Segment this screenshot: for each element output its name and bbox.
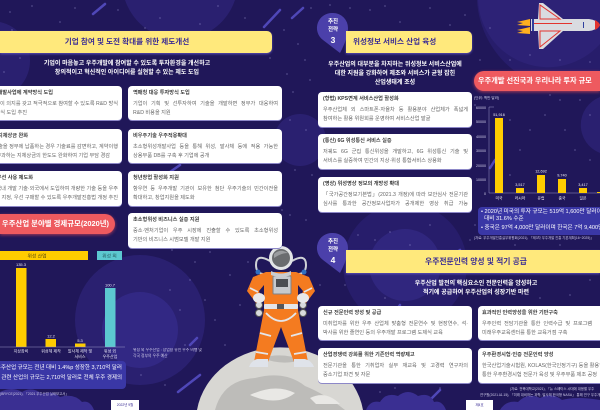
- heading: space economy by sector: [0, 214, 115, 234]
- pin: strategy 3: 전략: [328, 25, 338, 33]
- bar chart: space economy by sector: 위성 외: [102, 252, 117, 260]
- card: youth startups: 항우연 등 우주개발 기관이 보유한 첨단 우주기술의 민간이전을: [133, 186, 278, 192]
- text: space workforce lede: [415, 280, 538, 296]
- card: 6G: (통신) 6G 위성통신 서비스 실증: [323, 138, 392, 144]
- card: training infrastructure: 효과적인 인력양성을 위한 기반구축: [482, 310, 558, 316]
- bar chart: space economy by sector: 12.2: [47, 334, 56, 338]
- text: system improvement lede: [44, 60, 210, 76]
- card: reverse matching: R&D 비용을 지원: [133, 110, 171, 116]
- card: priority use system: [0, 171, 122, 206]
- text: satellite information lede: 대한 지원을 강화하여 제조와 서비스가 균형 잡힌: [335, 70, 455, 76]
- text: space workforce lede: 우주산업 발전의 핵심요소인 전문인력을 양성하고: [415, 280, 537, 286]
- bar chart: investment by country: 미국: [496, 196, 503, 200]
- card: existing workforce: 전문기관을 통한 기취업자 실무 재교육 및 고경력 연구자의: [323, 362, 468, 368]
- heading: investment comparison: [474, 71, 600, 90]
- card: 6G: 서비스를 실증하여 민간의 지상·위성 통합서비스 상용화: [323, 158, 442, 164]
- bar chart: investment by country: (단위: 백만 달러): [474, 95, 499, 100]
- panel: system improvement heading: 기업 참여 및 도전 확대를 위한 제도개선: [65, 37, 189, 46]
- bar chart: investment by country: 0: [484, 192, 486, 196]
- bar chart: investment by country: 3,517: [515, 183, 525, 187]
- card: KPS: 우주산업체 외 스마트폰·자율차 등 활용분야 산업체가 폭넓게: [323, 106, 468, 112]
- bar chart: space economy by sector: 우주산업: [103, 353, 118, 359]
- bar chart: space economy by sector: 위성 산업: [28, 252, 46, 260]
- card: 6G: [318, 134, 472, 169]
- card: test and certification: [478, 348, 600, 383]
- text: satellite information lede: [328, 60, 462, 86]
- card: small satellite business: 중소·벤처기업이 우주 시장에 진출할 수 있도록 초소형위성: [133, 228, 278, 234]
- card: priority use system: 국내 개발 기술·외국에서 도입하여 개량한 기술 등을 우주: [0, 186, 118, 192]
- card: test and certification: 우주환경시험·인증 전문인력 양성: [482, 352, 553, 358]
- card: existing workforce: 중소기업 파견 및 자문: [323, 372, 370, 378]
- bar chart: space economy by sector: 지상장비: [14, 348, 29, 354]
- panel: system improvement heading: [0, 31, 272, 53]
- bar chart: investment by country: 51,916: [493, 113, 505, 117]
- callout: space economy summary: [0, 361, 126, 389]
- card: new workforce: [318, 306, 472, 340]
- heading: satellite information services: 위성정보 서비스 산업 육성: [353, 37, 436, 46]
- bar chart: investment by country: 40000: [476, 135, 486, 139]
- note: non-satellite space industry: [133, 348, 202, 358]
- source: workforce section second line: 연구원(2021.11.15), 「미래 대비하는 과학, 발사체 한국형 NASA」 통해 연구 우주개발: [480, 392, 600, 396]
- card: KPS: 참여하는 활용 위원회를 운영하여 서비스산업 발굴: [323, 116, 430, 122]
- card: youth startups: [128, 171, 282, 206]
- card: youth startups: 청년창업 활성화 지원: [133, 175, 179, 181]
- card: new workforce: 미취업자를 위한 우주 산업체 맞춤형 전문연수 및 현장연수, 석·: [323, 320, 468, 326]
- bar chart: space economy by sector: 발사체 제작 및: [68, 348, 92, 354]
- bar chart: investment by country: 3,417: [578, 183, 588, 187]
- bar chart: investment by country: 50000: [476, 120, 486, 124]
- card: reverse matching: [128, 86, 282, 120]
- card: non-space technology: 상용부품 DB를 구축 후 기업에 공개: [133, 152, 209, 158]
- text: satellite information lede: 우주산업의 대부분을 차지하는 위성정보 서비스산업에: [328, 62, 462, 68]
- card: KPS: [318, 92, 472, 127]
- page number box: 제4호: [475, 403, 484, 407]
- bar chart: space economy by sector: 위성 외: [104, 348, 116, 354]
- bar chart: investment by country: 일본: [580, 196, 587, 200]
- heading: satellite information services: [346, 31, 472, 53]
- callout: investment summary: [478, 207, 600, 235]
- text: system improvement lede: 창의적이고 혁신적인 아이디어를 실현할 수 있는 제도 도입: [55, 70, 199, 76]
- card: non-space technology: 초소형위성개발사업 등을 통해 위성, 발사체 등에 적용 가능한: [133, 144, 278, 150]
- heading: space workforce: [346, 250, 600, 273]
- card: non-space technology: 비우주기술 우주적용확대: [133, 133, 187, 139]
- bar chart: space economy by sector: 135.3: [16, 262, 27, 267]
- card: imagery: (영상) 위성영상 정보의 개방성 확대: [323, 181, 399, 187]
- card: 6G: 저궤도 6G 군집 통신위성을 개발하고, 6G 위성통신 기술 및: [323, 148, 468, 154]
- card: non-space technology: [128, 129, 282, 163]
- source: right chart: (자료: 우주개발진흥실무위원회(2021), 「제3차 우주개발 진흥 기본계획(16~2025)」: [474, 236, 594, 240]
- bar chart: investment by country: 60000: [476, 106, 486, 110]
- note: non-satellite space industry: 각국 정부의 우주 예산: [133, 354, 168, 358]
- card: existing workforce: [318, 348, 472, 383]
- source: workforce section: (자료: 전북대학교(2021), 「뉴 스페이스 시대에 대응할 우주: [510, 387, 594, 391]
- card: imagery: 「국가공간정보기본법」(2021.3 개정)에 따라 보안심사 전문기관: [323, 192, 468, 198]
- card: reverse matching: 기업이 기획 및 선투자하여 기술을 개발하면 정부가 대응하여: [133, 100, 278, 106]
- callout: investment summary: 대비 31.6% 수준: [484, 216, 524, 222]
- source: left chart: (BRYCE(2021), 「2021 우주산업 실태보고서」: [0, 392, 69, 396]
- bar chart: investment by country: 10000: [476, 178, 486, 182]
- bar chart: investment by country: 9,740: [557, 174, 567, 178]
- card: imagery: [318, 177, 472, 212]
- pin: strategy 4: 추진: [328, 237, 338, 245]
- bar chart: investment by country: 러시아: [515, 196, 526, 200]
- card: training infrastructure: 우주인력 전담기관을 통한 인력수급 및 프로그램: [482, 320, 592, 326]
- bar chart: space economy by sector: 100.7: [105, 282, 116, 288]
- card: new workforce: 박사를 위한 졸연인 등의 우주개발 프로그램 도제식 교육: [323, 330, 443, 336]
- text: space workforce lede: 적기에 공급하여 우주산업의 성장기반 마련: [423, 290, 529, 296]
- bar chart: space economy by sector: 위성체 제작: [41, 348, 61, 354]
- bar chart: space economy by sector: 서비스: [74, 353, 86, 359]
- card: reverse matching: 역매칭 대응 투자방식 도입: [133, 90, 190, 96]
- page number box: [466, 400, 493, 410]
- bar chart: investment by country: 12,692: [535, 170, 547, 174]
- card: new workforce: 신규 전문인력 양성 및 공급: [323, 310, 381, 316]
- bar chart: investment by country: 중국: [558, 196, 566, 200]
- card: contract method: [0, 86, 122, 120]
- card: existing workforce: 산업경쟁력 강화를 위한 기존인력 역량제고: [323, 352, 415, 358]
- card: KPS: (항법) KPS연계 서비스산업 활성화: [323, 96, 399, 102]
- card: small satellite business: 초소형위성 비즈니스 실증 지원: [133, 217, 199, 223]
- card: test and certification: 통한 우주환경시험 전문가 육성 및 우주부품 제조 공정: [482, 372, 597, 378]
- pin: strategy 3: 3: [331, 35, 336, 45]
- card: late penalty relief: [0, 129, 122, 163]
- heading: space workforce: 우주전문인력 양성 및 적기 공급: [425, 257, 527, 266]
- bar chart: space economy by sector: 5.3: [77, 338, 84, 343]
- card: youth startups: 확대하고, 창업지원을 제도화: [133, 194, 195, 200]
- date box: [111, 400, 139, 410]
- text: system improvement lede: 기업이 마음놓고 우주개발에 참여할 수 있도록 투자환경을 개선하고: [44, 61, 210, 67]
- card: small satellite business: 기반의 비즈니스 시범모델 개발 지원: [133, 236, 210, 242]
- card: training infrastructure: 미래우주교육센터를 통한 교육거점 구축: [482, 330, 567, 336]
- moon surface: [197, 347, 363, 410]
- bar chart: investment by country: 유럽: [538, 196, 545, 200]
- bar chart: investment by country: 20000: [476, 164, 486, 168]
- bar chart: investment by country: 30000: [476, 149, 486, 153]
- pin: strategy 3: 추진: [328, 17, 338, 25]
- card: small satellite business: [128, 213, 282, 248]
- text: satellite information lede: 산업생태계 조성: [375, 80, 415, 86]
- heading: investment comparison: 우주개발 선진국과 우리나라 투자 규모: [478, 76, 592, 85]
- astronaut: [247, 246, 315, 367]
- card: imagery: 심사를 통과한 공간정보사업자가 공개제한 영상 취급 가능: [323, 200, 468, 206]
- pin: strategy 4: 전략: [328, 245, 338, 253]
- date box: 2022년 9월: [117, 403, 133, 407]
- pin: strategy 4: 4: [331, 255, 336, 265]
- note: non-satellite space industry: 위성 외 우주산업 : 상업용 유인 우주 비행 및: [133, 348, 202, 352]
- card: training infrastructure: [478, 306, 600, 340]
